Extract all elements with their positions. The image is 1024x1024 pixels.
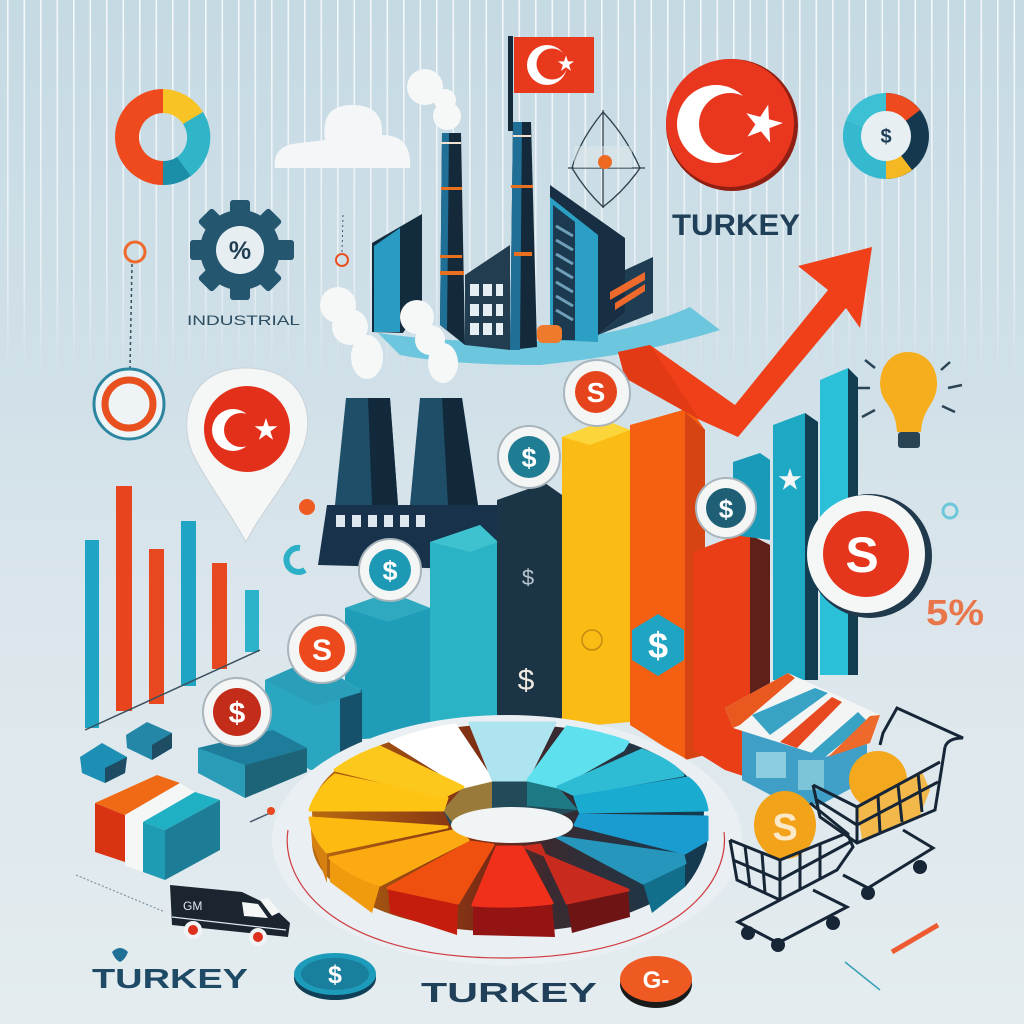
pie inner wall [443, 780, 578, 825]
label: turkey bottom left: TURKEY [92, 963, 248, 994]
right tower [550, 185, 625, 342]
icon: delivery van [170, 885, 290, 946]
pie outline arc [287, 830, 724, 958]
icon: donut chart top left [115, 89, 210, 185]
dark bar: $ [518, 664, 535, 697]
coin: bottom orange [620, 956, 692, 1008]
icon: shopping carts [730, 708, 963, 952]
label: turkey bottom centre: TURKEY [421, 977, 597, 1008]
icon: ring pin with dotted line [94, 242, 164, 439]
bar chart: left thin bars [85, 486, 260, 730]
coin: dark teal [498, 426, 560, 488]
lower factory [287, 398, 500, 572]
water base [378, 307, 720, 365]
big coin: S [845, 527, 879, 583]
donut pie chart [272, 715, 742, 965]
big coin [807, 494, 932, 618]
cart wheels [741, 860, 927, 952]
tall teal bar [820, 368, 858, 675]
dotted trail [76, 875, 165, 912]
coin: dark teal: $ [521, 443, 537, 473]
icon: map pin with flag [187, 368, 308, 542]
coin: bottom orange: G- [643, 967, 669, 994]
dark bar: $ [522, 565, 534, 590]
label icon [112, 948, 128, 962]
icon: storefront [725, 673, 880, 805]
heading: turkey: TURKEY [672, 209, 800, 242]
coin: red [203, 678, 271, 746]
chimney left [440, 133, 465, 345]
factory with chimneys and flag [320, 36, 720, 383]
icon: light bulb [858, 352, 962, 448]
coin: slate: $ [719, 494, 734, 524]
coin: hexagon teal: $ [648, 625, 668, 666]
chimney right [510, 122, 537, 350]
pie side faces [310, 818, 707, 937]
flag pole and flag [508, 36, 594, 131]
coin: bottom teal: $ [328, 961, 342, 989]
step bar 3 [345, 592, 430, 740]
pie centre hole [451, 807, 573, 843]
label: industrial: INDUSTRIAL [187, 312, 300, 328]
icon: cloud [275, 105, 410, 168]
coin: orange: S [312, 634, 332, 667]
coin: teal [359, 539, 421, 601]
yellow bar [562, 420, 630, 728]
icon: small pie chart top right [843, 93, 929, 179]
pie underlay [312, 724, 704, 900]
coin: red top: S [587, 377, 605, 408]
left building [372, 214, 422, 333]
teal bar [773, 413, 818, 680]
coin: teal: $ [382, 556, 398, 586]
smoke clouds [320, 69, 461, 383]
gold coin front: S [772, 807, 798, 849]
orange bar [630, 408, 705, 760]
ticket mark [845, 925, 938, 990]
coin: red: $ [229, 697, 246, 730]
icon: delivery van: GM [183, 899, 202, 913]
pie dark base [312, 752, 704, 932]
icon: compass diagram [568, 110, 645, 208]
label: turkey bottom left [92, 948, 248, 994]
small teal back bar [733, 453, 770, 540]
back cart [813, 708, 963, 888]
icon: small ring [943, 504, 957, 518]
orange blob [537, 325, 562, 343]
coin: red top [564, 360, 630, 426]
step bar 2 [265, 660, 362, 770]
icon: gear with percent [190, 200, 294, 300]
gift box [95, 775, 220, 880]
right wing [598, 257, 653, 335]
red bar [693, 532, 770, 785]
center block [465, 245, 510, 350]
rising bars chart [198, 368, 858, 798]
icon: gear with percent: % [229, 237, 251, 265]
coin: orange [288, 615, 356, 683]
label: five percent: 5% [926, 592, 984, 633]
gold coin front [754, 791, 816, 859]
small blocks [80, 722, 172, 783]
pie floor [272, 715, 742, 965]
step bar 1 [198, 730, 307, 798]
icon: small red marker [336, 215, 348, 266]
pie slices [310, 723, 707, 906]
icon: small pin [250, 807, 275, 822]
coin: bottom teal [294, 953, 376, 1000]
dark bar [497, 483, 562, 730]
icon: small pie chart top right: $ [880, 126, 892, 148]
red trend arrow [618, 247, 872, 437]
gold coin back [849, 751, 907, 809]
front cart [730, 803, 853, 943]
step bar 4 [430, 525, 498, 728]
icon: turkey flag circle [666, 59, 798, 191]
coin: hexagon teal [632, 614, 684, 676]
coin: slate [696, 478, 756, 538]
